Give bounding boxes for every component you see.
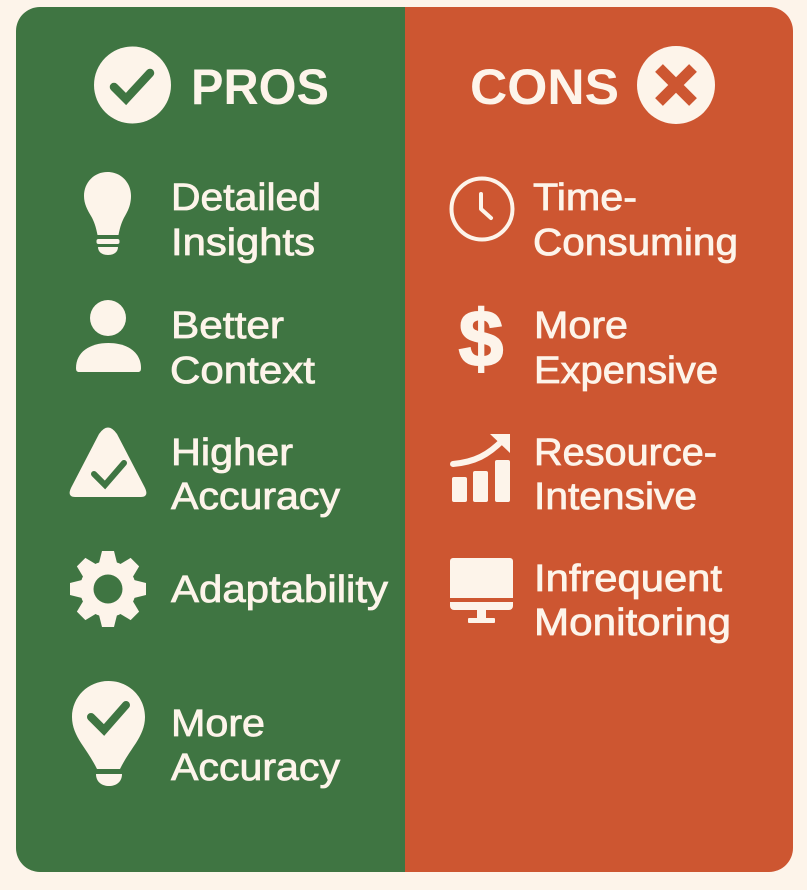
item: time-consuming (452, 177, 738, 264)
item: detailed insights (84, 172, 321, 264)
icon: dollar sign: $ (459, 294, 503, 383)
item: better context (76, 300, 315, 392)
item: infrequent monitoring (450, 558, 731, 644)
text: infrequent monitoring: Monitoring (534, 602, 731, 644)
text: infrequent monitoring: Infrequent (534, 558, 722, 600)
text: more expensive (534, 305, 718, 392)
pros heading (94, 46, 329, 124)
icon: check in circle (94, 46, 171, 124)
text: resource-intensive (534, 432, 717, 518)
text: more accuracy: Accuracy (171, 747, 340, 789)
text: more accuracy (171, 703, 340, 789)
text: time-consuming: Consuming (533, 222, 738, 264)
text: time-consuming (533, 177, 738, 264)
item: adaptability (70, 551, 388, 627)
text: better context: Better (171, 305, 284, 347)
icon: cross in circle (637, 46, 715, 124)
text: better context: Context (170, 350, 315, 392)
icon: clock (452, 178, 512, 240)
icon: monitor (450, 558, 513, 623)
text: higher accuracy (171, 432, 340, 518)
cons panel background (405, 7, 793, 872)
text: better context (170, 305, 315, 392)
text: adaptability: Adaptability (171, 569, 388, 611)
text: detailed insights: Detailed (171, 177, 321, 219)
text: detailed insights (171, 177, 321, 264)
icon: bulb with check (72, 681, 145, 786)
cons title: CONS (470, 59, 619, 115)
item: higher accuracy (70, 428, 340, 518)
icon: triangle with check (70, 428, 146, 497)
pros title: PROS (191, 59, 329, 115)
text: higher accuracy: Higher (171, 432, 293, 474)
text: infrequent monitoring (534, 558, 731, 644)
item: more accuracy (72, 681, 340, 789)
text: higher accuracy: Accuracy (171, 476, 340, 518)
text: resource-intensive: Resource- (534, 432, 717, 474)
cons heading (470, 46, 715, 124)
pros panel background (16, 7, 405, 872)
text: more expensive: More (534, 305, 628, 347)
text: resource-intensive: Intensive (534, 476, 697, 518)
item: more expensive (459, 294, 718, 392)
icon: gear (70, 551, 146, 627)
text: detailed insights: Insights (171, 222, 315, 264)
icon: light bulb (84, 172, 131, 255)
text: more accuracy: More (171, 703, 265, 745)
text: more expensive: Expensive (534, 350, 718, 392)
icon: person (76, 300, 141, 372)
panel: cons (405, 7, 793, 872)
panel: pros (16, 7, 405, 872)
text: time-consuming: Time- (533, 177, 637, 219)
icon: rising bar chart (452, 434, 510, 502)
item: resource-intensive (452, 432, 717, 518)
